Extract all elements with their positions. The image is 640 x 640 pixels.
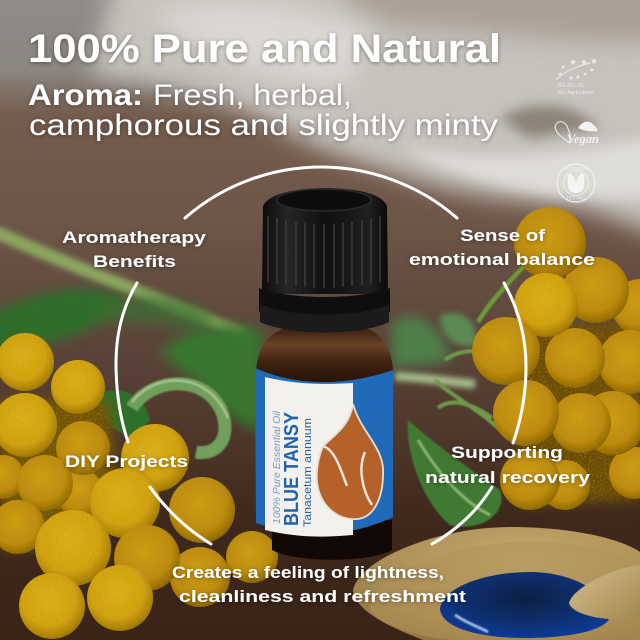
blue oil pool bbox=[440, 572, 610, 638]
label: DIY projects: DIY Projects bbox=[65, 452, 188, 471]
label: aromatherapy benefits bbox=[62, 228, 207, 271]
left fern frond bbox=[96, 381, 228, 453]
right fern frond bbox=[408, 264, 526, 527]
icon: EU organic leaf: EU Agriculture bbox=[558, 90, 594, 96]
title: 100% Pure and Natural bbox=[28, 27, 501, 71]
icon: no animal testing badge bbox=[557, 164, 595, 202]
background foliage bbox=[0, 225, 476, 432]
aroma description: Fresh, herbal, bbox=[153, 79, 352, 112]
icon: EU organic leaf bbox=[556, 58, 597, 96]
label white and blue wrap bbox=[255, 368, 393, 537]
circular frame arcs bbox=[116, 167, 526, 544]
golden dish with blue oil bbox=[353, 527, 640, 640]
label: supporting natural recovery bbox=[425, 443, 591, 487]
bottle base bbox=[272, 520, 392, 560]
label: aromatherapy benefits: Benefits bbox=[93, 252, 176, 271]
label: supporting natural recovery: Supporting bbox=[451, 443, 563, 462]
label: lightness and refreshment: Creates a feeling of lightness, bbox=[172, 563, 444, 582]
amber glass shoulder bbox=[256, 328, 393, 385]
icon: orange oil drop bbox=[317, 404, 383, 519]
label white and blue wrap: Tanacetum annuum bbox=[302, 418, 314, 527]
label: lightness and refreshment: cleanliness and refreshment bbox=[179, 587, 466, 606]
icon: EU organic leaf: BG-BIO-21 bbox=[558, 83, 584, 89]
left tansy flower cluster bbox=[0, 333, 278, 639]
icon: no animal testing badge: NO ANIMAL bbox=[564, 166, 589, 171]
icon: vegan mark: Vegan bbox=[567, 131, 599, 146]
black cap bbox=[259, 188, 390, 332]
label: sense of emotional balance: Sense of bbox=[460, 226, 545, 245]
label white and blue wrap: BLUE TANSY bbox=[281, 411, 303, 526]
right tansy flower cluster bbox=[472, 207, 640, 510]
label text: 100% Pure Essential Oil bbox=[272, 410, 283, 524]
label: sense of emotional balance: emotional balance bbox=[409, 250, 595, 269]
aroma description bbox=[28, 79, 498, 142]
label: sense of emotional balance bbox=[409, 226, 595, 269]
aroma description: camphorous and slightly minty bbox=[29, 109, 498, 142]
icon: vegan mark bbox=[555, 122, 599, 146]
aroma description: Aroma: bbox=[28, 79, 143, 112]
label: aromatherapy benefits: Aromatherapy bbox=[62, 228, 207, 247]
label: lightness and refreshment bbox=[172, 563, 466, 606]
essential oil bottle bbox=[255, 188, 393, 560]
label: supporting natural recovery: natural recovery bbox=[425, 468, 591, 487]
spoon bbox=[569, 565, 640, 620]
icon: no animal testing badge: TESTING bbox=[566, 196, 586, 200]
